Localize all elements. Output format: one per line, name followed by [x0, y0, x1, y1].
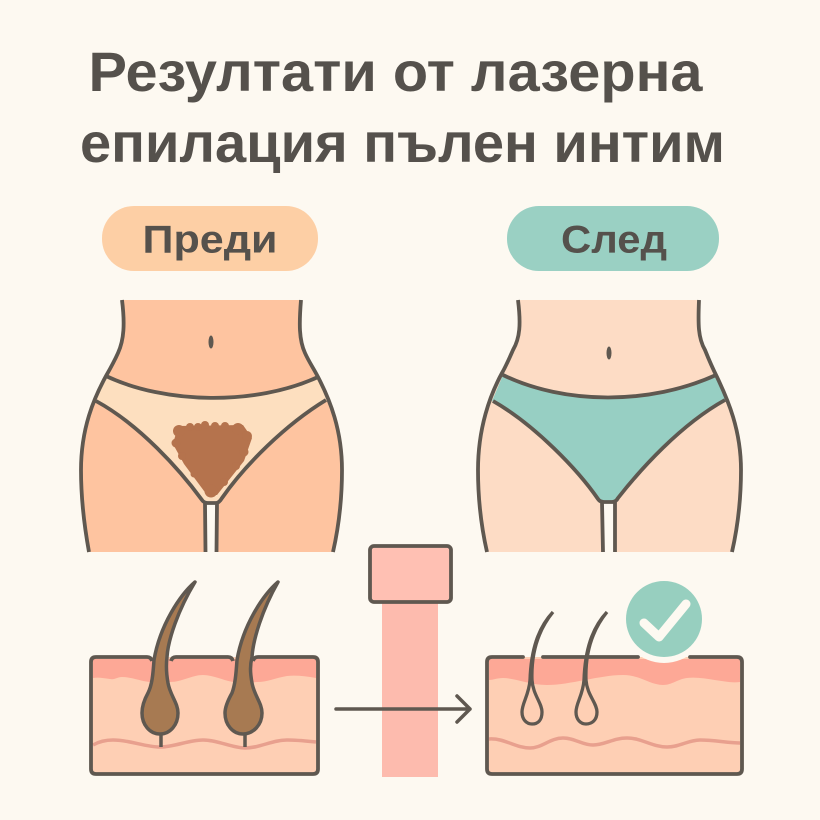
title: епилация пълен интим	[80, 111, 725, 174]
icon: check badge	[620, 575, 708, 663]
hair follicle 1	[142, 582, 195, 747]
briefs before	[95, 376, 327, 503]
laser device	[370, 546, 451, 777]
diagram: skin after	[487, 612, 742, 774]
title: Резултати от лазерна	[88, 40, 703, 103]
icon: navel	[208, 336, 214, 348]
badge: before: Преди	[142, 218, 278, 262]
icon: navel	[606, 346, 612, 360]
diagram: skin before	[91, 582, 318, 774]
wavy dermis line	[489, 738, 740, 748]
thin hair 1	[522, 612, 553, 724]
hair follicle 2	[225, 582, 278, 747]
badge: after	[507, 206, 719, 271]
pubic hair	[172, 421, 252, 498]
wavy dermis line	[93, 740, 316, 748]
thin hair 2	[576, 612, 607, 724]
briefs after	[492, 375, 726, 502]
arrow	[336, 696, 470, 722]
title	[80, 40, 725, 174]
skin outline	[91, 657, 318, 774]
skin outline	[487, 657, 742, 774]
badge: after: След	[561, 218, 667, 262]
illustration: body after	[478, 300, 741, 552]
illustration: body before	[81, 300, 342, 552]
badge: before	[102, 206, 318, 271]
